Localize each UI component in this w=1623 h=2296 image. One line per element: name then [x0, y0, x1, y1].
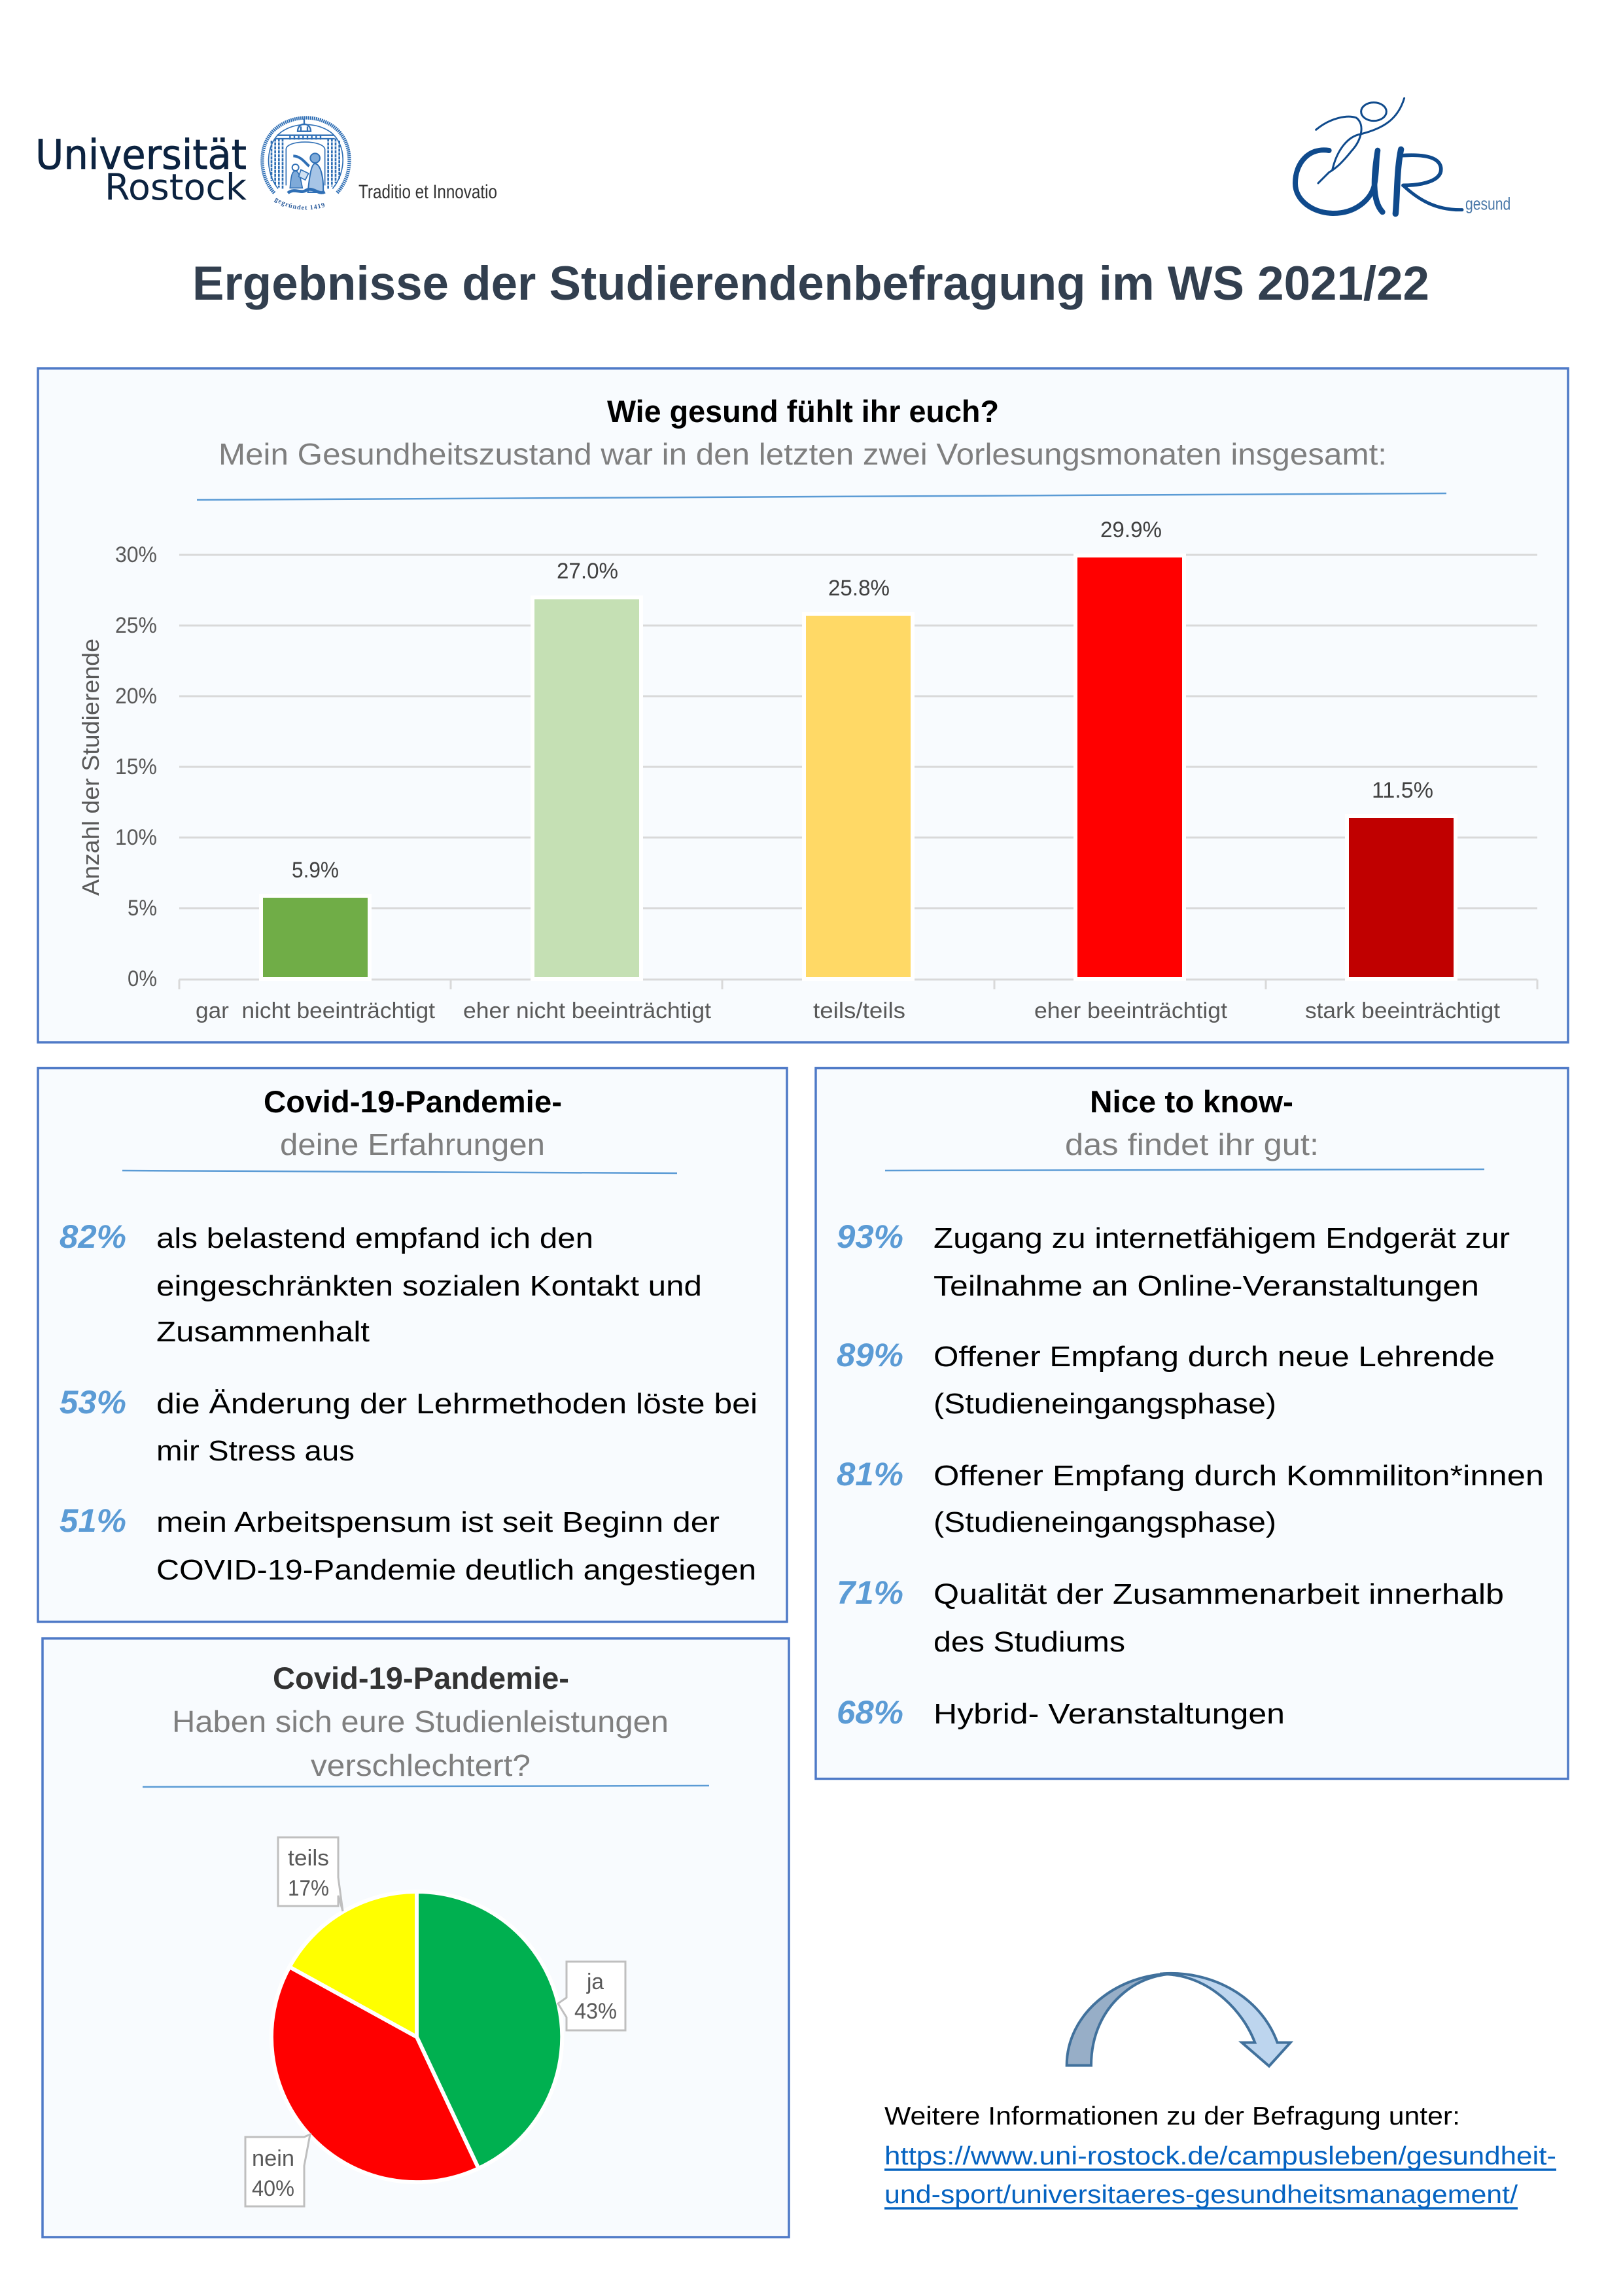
item 82%: eingeschränkten sozialen Kontakt und: [156, 1270, 702, 1302]
item 93%: [837, 1218, 1510, 1302]
subheading: verschlechtert?: [311, 1748, 531, 1782]
item 71%: [837, 1574, 1504, 1658]
callout: teils: teils: [288, 1846, 329, 1871]
item 82%: 82%: [60, 1218, 126, 1255]
callout: teils: 17%: [288, 1876, 329, 1901]
heading: Covid-19-Pandemie-: [273, 1661, 569, 1695]
panel: health bar chart: [38, 368, 1568, 1042]
y axis labels: 0%: [128, 966, 157, 991]
subheading: Mein Gesundheitszustand war in den letzten zwei Vorlesungsmonaten insgesamt:: [218, 437, 1387, 471]
data labels: [292, 518, 1433, 883]
y axis labels: 25%: [115, 613, 157, 638]
subheading: Haben sich eure Studienleistungen: [172, 1704, 669, 1739]
logo: Universität Rostock: Rostock: [105, 166, 247, 208]
item 51%: COVID-19-Pandemie deutlich angestiegen: [156, 1554, 756, 1586]
item 89%: 89%: [837, 1337, 903, 1373]
item 53%: [60, 1384, 758, 1467]
panel: Nice to know: [816, 1068, 1568, 1778]
arrow: curved pointing to link: [1067, 1973, 1291, 2066]
item 82%: als belastend empfand ich den: [156, 1222, 593, 1254]
item 68%: [837, 1694, 1285, 1731]
item 81%: 81%: [837, 1456, 903, 1492]
logo: Universität Rostock: Traditio et Innovatio: [358, 181, 497, 203]
heading: Nice to know-: [1090, 1084, 1293, 1119]
y axis labels: 5%: [128, 896, 157, 921]
item 71%: Qualität der Zusammenarbeit innerhalb: [934, 1578, 1504, 1610]
y axis labels: 20%: [115, 684, 157, 709]
item 81%: Offener Empfang durch Kommiliton*innen: [934, 1460, 1544, 1492]
item 81%: [837, 1456, 1544, 1538]
y axis labels: 10%: [115, 825, 157, 850]
callout: nein: 40%: [252, 2176, 294, 2201]
heading: Wie gesund: Wie gesund fühlt ihr euch?: [607, 394, 999, 429]
title: Ergebnisse der Studierendenbefragung im WS 2021/22: [192, 257, 1429, 310]
logo: Universität Rostock: [35, 116, 497, 210]
category labels: gar nicht beeinträchtigt: [196, 998, 436, 1023]
item 53%: mir Stress aus: [156, 1435, 355, 1467]
subheading: deine Erfahrungen: [280, 1127, 545, 1161]
item 51%: 51%: [60, 1502, 126, 1539]
y axis labels: 15%: [115, 754, 157, 779]
item 71%: 71%: [837, 1574, 903, 1611]
heading: Covid-19-Pandemie-: [264, 1084, 562, 1119]
item 82%: [60, 1218, 702, 1348]
panel: Covid experiences: [38, 1068, 787, 1621]
text: further information with link: Weitere Informationen zu der Befragung unter:: [884, 2102, 1460, 2130]
item 81%: (Studieneingangsphase): [934, 1506, 1276, 1538]
item 89%: Offener Empfang durch neue Lehrende: [934, 1341, 1495, 1373]
logo: Universität Rostock: Universität: [35, 131, 247, 179]
pie chart: [271, 1892, 562, 2182]
item 53%: die Änderung der Lehrmethoden löste bei: [156, 1388, 758, 1420]
y axis title: Anzahl der Studierende: [77, 639, 104, 896]
callout: teils: [278, 1837, 343, 1911]
item 68%: 68%: [837, 1694, 903, 1731]
bars: [261, 556, 1456, 979]
category labels: eher beeinträchtigt: [1034, 998, 1228, 1023]
category labels: eher nicht beeinträchtigt: [463, 998, 712, 1023]
y axis labels: [115, 542, 157, 991]
item 89%: (Studieneingangsphase): [934, 1388, 1276, 1420]
item 89%: [837, 1337, 1495, 1420]
item 51%: [60, 1502, 756, 1586]
logo: CUR gesund: gesund: [1465, 194, 1510, 214]
data labels: 27.0%: [557, 559, 618, 584]
text: further information with link: https://www.uni-rostock.de/campusleben/gesundheit-: [884, 2142, 1556, 2170]
bar chart: [77, 518, 1537, 1023]
item 93%: Teilnahme an Online-Veranstaltungen: [934, 1270, 1479, 1302]
y axis labels: 30%: [115, 542, 157, 567]
item 93%: Zugang zu internetfähigem Endgerät zur: [934, 1222, 1510, 1254]
data labels: 5.9%: [292, 858, 339, 883]
callout: ja: 43%: [574, 1999, 617, 2024]
item 68%: Hybrid- Veranstaltungen: [934, 1698, 1285, 1730]
callout: nein: nein: [252, 2146, 294, 2171]
text: further information with link: und-sport/universitaeres-gesundheitsmanagement/: [884, 2181, 1518, 2209]
icon: university seal: gegründet 1419: [273, 198, 324, 210]
item 71%: des Studiums: [934, 1626, 1125, 1658]
item 82%: Zusammenhalt: [156, 1316, 370, 1348]
data labels: 29.9%: [1100, 518, 1162, 542]
item 53%: 53%: [60, 1384, 126, 1421]
subheading: [172, 1704, 669, 1782]
text: further information with link: [884, 2102, 1556, 2209]
category labels: [196, 998, 1501, 1023]
callout: ja: ja: [586, 1969, 604, 1994]
icon: university seal: [260, 116, 351, 210]
logo: CUR gesund: [1295, 98, 1510, 214]
category labels: stark beeinträchtigt: [1305, 998, 1501, 1023]
item 93%: 93%: [837, 1218, 903, 1255]
panel: study performance pie chart: [43, 1638, 789, 2237]
callout: nein: [245, 2134, 310, 2206]
callout: ja: [558, 1962, 625, 2030]
subheading: das findet ihr gut:: [1065, 1127, 1319, 1161]
item 51%: mein Arbeitspensum ist seit Beginn der: [156, 1506, 720, 1538]
category labels: teils/teils: [813, 998, 905, 1023]
data labels: 11.5%: [1372, 778, 1433, 803]
data labels: 25.8%: [828, 576, 890, 601]
